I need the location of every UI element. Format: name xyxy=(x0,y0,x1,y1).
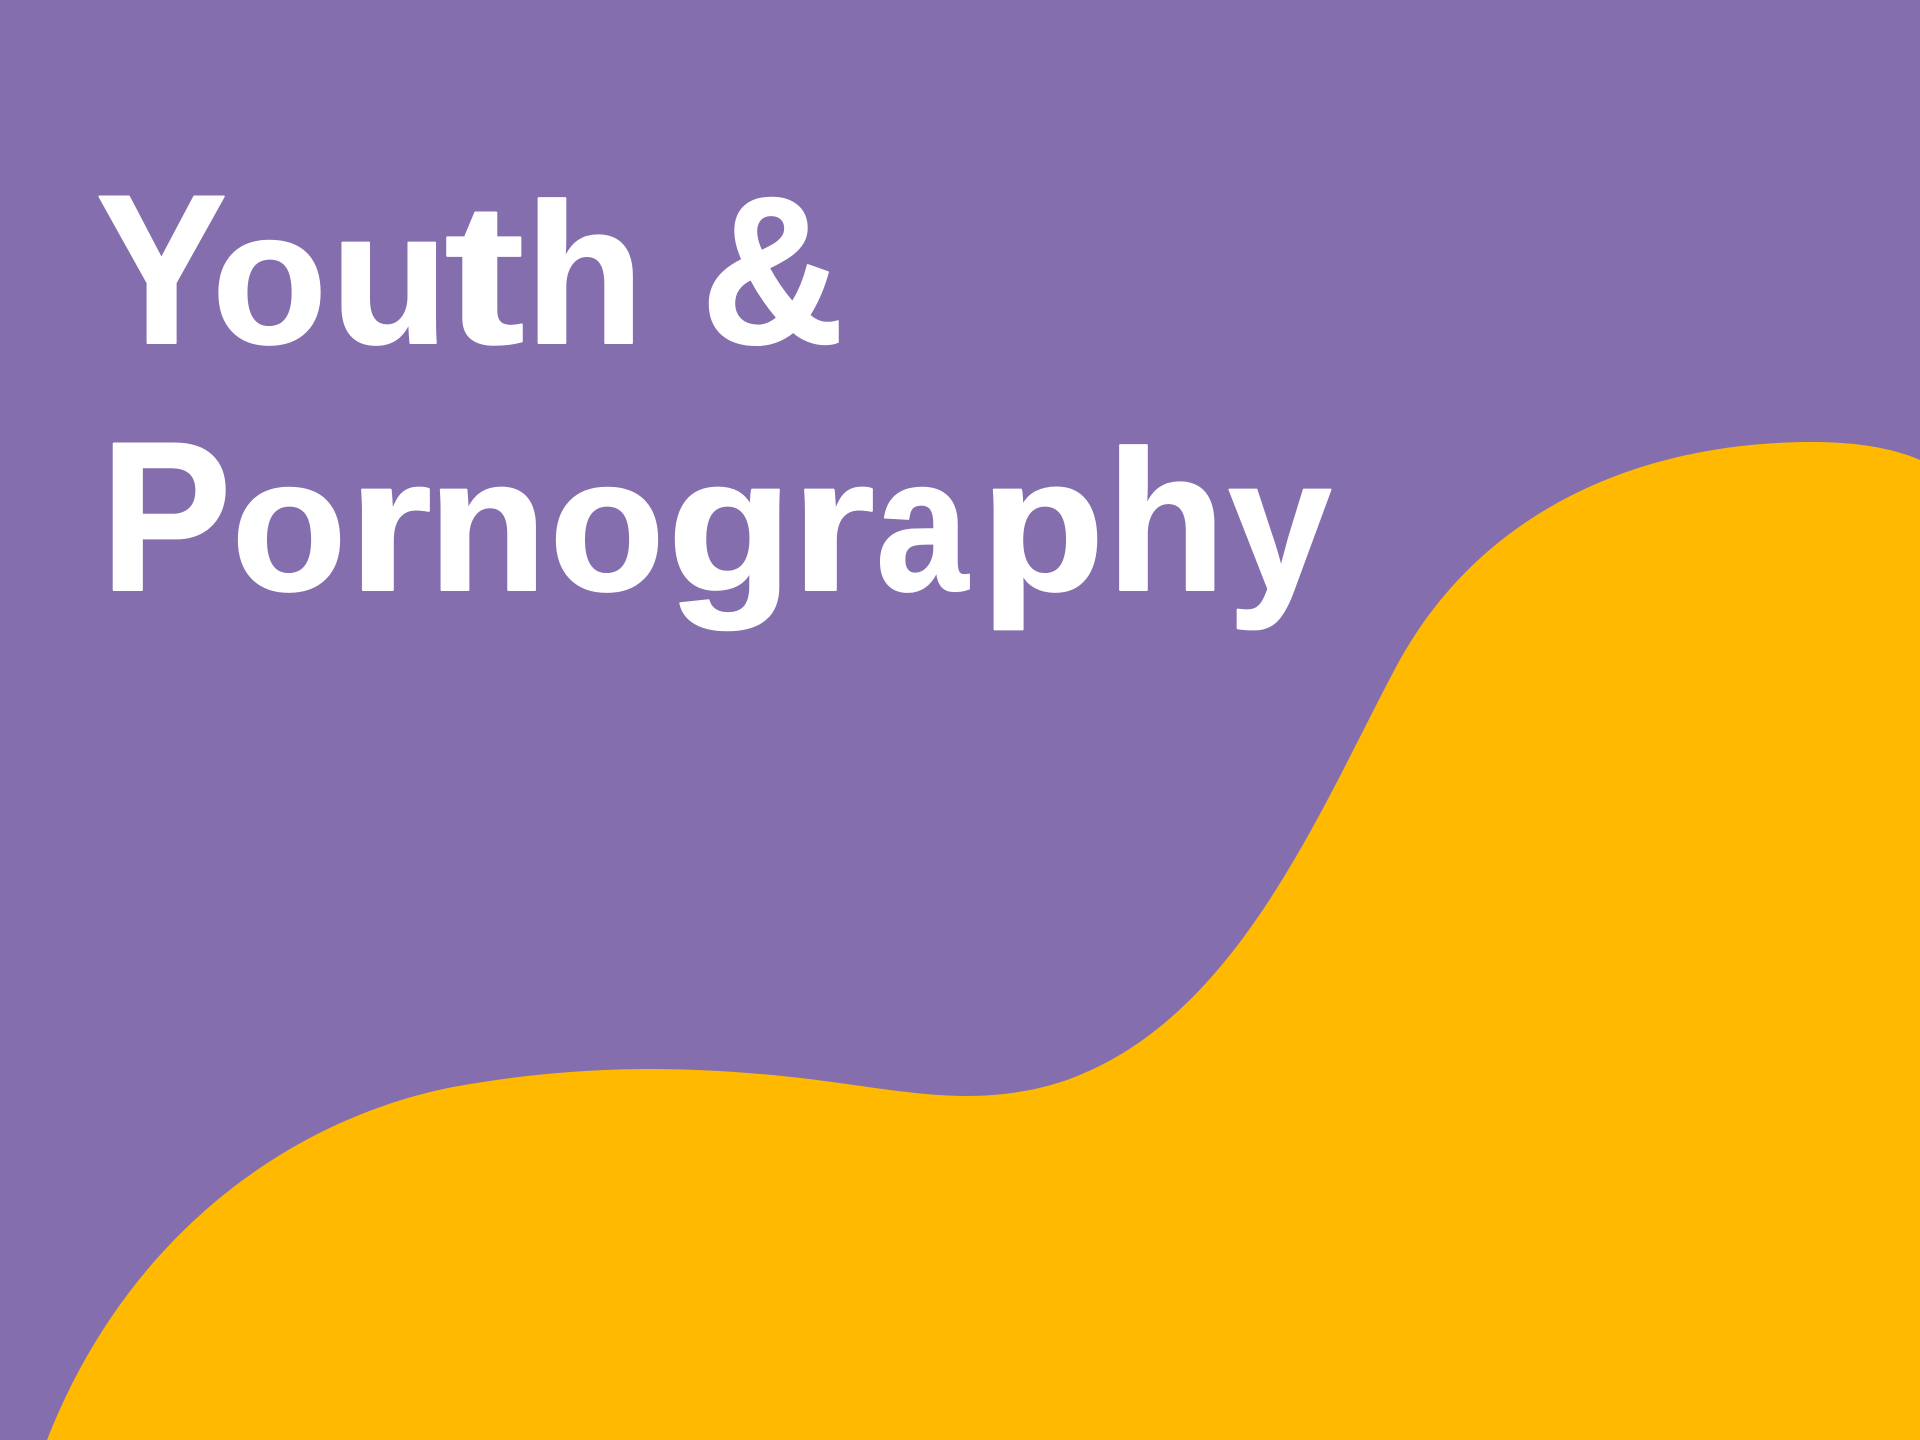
title: g xyxy=(668,419,792,631)
title: y xyxy=(1228,419,1332,631)
title: r xyxy=(791,419,875,631)
title: t xyxy=(444,163,524,386)
title: Y xyxy=(96,151,227,389)
title: h xyxy=(1106,410,1226,633)
title: a xyxy=(876,419,969,631)
title xyxy=(96,151,1332,636)
title: r xyxy=(348,419,432,631)
title: o xyxy=(212,172,327,384)
yellow wave shape xyxy=(47,442,1920,1440)
title: o xyxy=(550,419,664,631)
title: p xyxy=(980,419,1104,631)
title: P xyxy=(100,398,232,636)
title: n xyxy=(428,419,547,631)
title: u xyxy=(330,172,448,384)
title: o xyxy=(232,419,346,631)
title: & xyxy=(701,153,844,388)
title: h xyxy=(525,163,644,386)
